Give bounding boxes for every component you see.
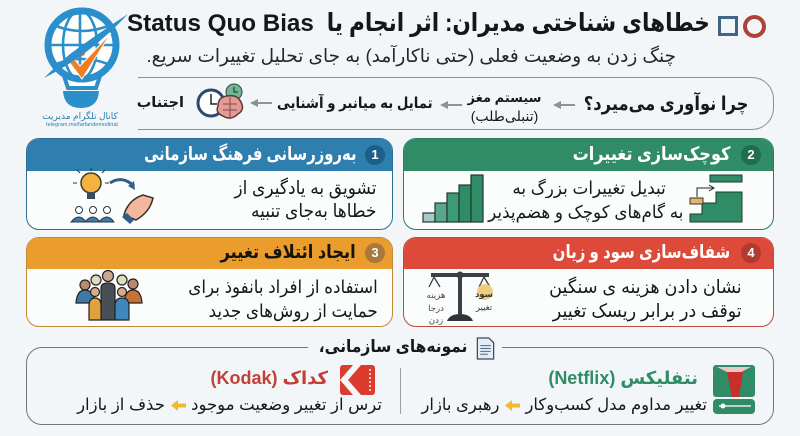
brain system label: (تنبلی‌طلب) (471, 108, 538, 124)
Netflix description: تغییر مداوم مدل کسب‌وکار رهبری بازار (422, 396, 707, 414)
card 1 header (27, 139, 392, 171)
panel: card 4 (403, 237, 774, 327)
card 1 number: 1 (371, 147, 379, 162)
Netflix name: نتفلیکس (Netflix) (548, 368, 698, 388)
card 3 header (27, 238, 392, 269)
scale left label: درجا (428, 302, 444, 312)
card 4 header (404, 238, 773, 269)
icon: square (718, 16, 738, 36)
icon: group of people (75, 270, 143, 321)
title latin: Status Quo Bias (127, 10, 314, 37)
card 2 number (741, 145, 761, 165)
icon: circle (743, 15, 766, 38)
scale left label (427, 290, 445, 325)
icon: Netflix (713, 365, 755, 414)
card 1 number (365, 145, 385, 165)
subtitle: چنگ زدن به وضعیت فعلی (حتی ناکارآمد) به جای تحلیل تغییرات سریع. (146, 45, 676, 66)
card 4 body: نشان دادن هزینه ی سنگین (549, 276, 742, 297)
panel: card 2 (403, 138, 774, 230)
icon: rising green bars (422, 174, 484, 223)
arrow: tendency to avoidance (250, 99, 272, 107)
title: خطاهای شناختی مدیران: اثر انجام یا (327, 9, 710, 37)
scale right label: سود (475, 289, 493, 299)
card 3 number: 3 (371, 245, 379, 260)
arrow: question to brain (553, 101, 575, 109)
card 3 number (365, 243, 385, 263)
logo address: telegram.me/farfandemodiriat (46, 122, 118, 128)
card 2 heading: کوچک‌سازی تغییرات (572, 143, 730, 164)
examples heading: نمونه‌های سازمانی، (318, 337, 467, 356)
logo: lightbulb with globe and check mark (44, 8, 128, 108)
card 4 number: 4 (747, 245, 755, 260)
arrow: brain to tendency (440, 101, 462, 109)
icon: balance scale (428, 272, 493, 321)
card 1 heading: به‌روزرسانی فرهنگ سازمانی (144, 143, 356, 164)
card 4 heading: شفاف‌سازی سود و زیان (552, 241, 730, 262)
card 1 body: خطاها به‌جای تنبیه (251, 200, 376, 221)
card 3 heading: ایجاد ائتلاف تغییر (221, 241, 356, 262)
card 3 body: استفاده از افراد بانفوذ برای (188, 277, 378, 297)
icon: Kodak (340, 365, 375, 395)
text: avoidance: اجتناب (137, 95, 184, 111)
brain system label (466, 90, 541, 124)
card 4 body (549, 276, 742, 322)
icon: document (476, 337, 494, 360)
scale right label: تغییر (476, 302, 492, 312)
scale right label (475, 289, 493, 312)
card 4 number (741, 243, 761, 263)
panel: card 1 (26, 138, 393, 230)
card 4 body: توقف در برابر ریسک تغییر (553, 300, 742, 321)
logo caption: کانال تلگرام مدیریت (42, 111, 118, 121)
card 2 header (404, 139, 773, 171)
tendency to shortcuts: تمایل به میانبر و آشنایی (277, 95, 433, 112)
scale left label: هزینه (427, 290, 445, 300)
brain system label: سیستم مغز (468, 90, 541, 105)
card 2 body line 2: به گام‌های کوچک و هضم‌پذیر (488, 202, 683, 222)
divider (400, 368, 401, 414)
panel: why innovation dies (138, 77, 774, 130)
icon: idea to applause (70, 168, 154, 224)
panel: organizational examples (26, 347, 774, 425)
Kodak description: ترس از تغییر وضعیت موجود حذف از بازار (77, 396, 382, 414)
Kodak name: کداک (Kodak) (211, 368, 328, 388)
card 1 body: تشویق به یادگیری از (234, 177, 376, 198)
icon: stairs and steps (690, 174, 742, 222)
scale left label: زدن (429, 315, 443, 325)
question: چرا نوآوری می‌میرد؟ (583, 94, 748, 115)
card 2 body line 1: تبدیل تغییرات بزرگ به (513, 178, 666, 198)
icon: clock and brain (196, 84, 244, 119)
panel: card 3 (26, 237, 393, 327)
examples heading backdrop (308, 340, 502, 356)
card 3 body: حمایت از روش‌های جدید (209, 301, 378, 321)
card 2 number: 2 (747, 147, 755, 162)
card 3 body (188, 277, 378, 322)
card 1 body (234, 177, 376, 221)
